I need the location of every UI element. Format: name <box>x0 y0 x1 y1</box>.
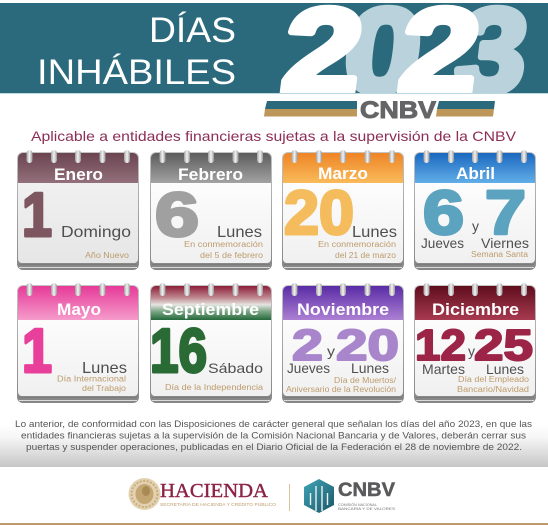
logo: CNBV: COMISIÓN NACIONAL <box>338 502 377 507</box>
calendar: Abril: Viernes <box>481 235 529 251</box>
subtitle: Aplicable a entidades financieras sujetas a la supervisión de la CNBV <box>31 128 517 144</box>
calendar: Mayo: 1 <box>22 317 52 386</box>
calendar: Noviembre: 20 <box>336 321 399 370</box>
calendar: Enero: Año Nuevo <box>85 251 130 260</box>
header banner <box>0 3 548 94</box>
calendar: Noviembre: Aniversario de la Revolución <box>286 385 396 394</box>
calendar: Enero: Domingo <box>61 224 131 241</box>
calendar: Mayo: Lunes <box>82 360 127 377</box>
title: INHÁBILES <box>37 53 236 92</box>
calendar: Septiembre: Día de la Independencia <box>165 383 264 392</box>
calendar: Septiembre: Septiembre <box>162 300 259 319</box>
calendar: Diciembre: 25 <box>474 321 533 370</box>
calendar: Marzo: del 21 de marzo <box>335 251 397 260</box>
calendar: Noviembre: 2 <box>292 321 323 370</box>
calendar: Marzo: En conmemoración <box>318 240 396 249</box>
calendar: Noviembre: Jueves <box>287 360 330 376</box>
calendar: Febrero: Febrero <box>178 165 243 184</box>
calendar: Mayo <box>17 283 139 403</box>
calendar: Enero <box>17 150 139 270</box>
calendar: Mayo: Día Internacional <box>57 374 126 384</box>
calendar: Enero: 1 <box>22 181 52 250</box>
calendar: Febrero: del 5 de febrero <box>200 251 264 260</box>
icon: CNBV hexagon <box>304 479 334 513</box>
icon: national seal <box>128 478 160 510</box>
calendar: Marzo: Marzo <box>318 164 368 183</box>
calendar: Diciembre: Día del Empleado <box>458 375 530 384</box>
logo: Hacienda: SECRETARÍA DE HACIENDA Y CRÉDITO PÚBLICO <box>160 501 277 507</box>
calendar: Noviembre: y <box>327 343 335 359</box>
calendar: Marzo: 20 <box>284 179 354 248</box>
calendar: Noviembre <box>282 283 404 403</box>
legal note: Lo anterior, de conformidad con las Disposiciones de carácter general que señalan los días del año 2023, en que las <box>15 419 532 430</box>
calendar: Septiembre <box>150 283 272 403</box>
calendar: Noviembre: Noviembre <box>297 300 389 319</box>
calendar: Febrero: En conmemoración <box>184 240 263 249</box>
calendar: Febrero: 6 <box>155 181 199 250</box>
legal note <box>0 419 548 467</box>
calendar: Septiembre: 16 <box>150 317 207 386</box>
calendar: Diciembre: y <box>468 343 475 359</box>
logo: Hacienda <box>128 478 277 510</box>
calendar: Diciembre <box>414 283 536 403</box>
CNBV stripes and wordmark <box>264 97 495 124</box>
logo: CNBV <box>304 479 396 513</box>
calendar: Abril: y <box>472 218 479 234</box>
calendar: Mayo: Mayo <box>57 300 101 319</box>
calendar: Abril <box>414 150 536 270</box>
calendar: Diciembre: Bancario/Navidad <box>457 385 529 394</box>
title <box>37 11 236 92</box>
calendar: Diciembre: Martes <box>422 361 465 377</box>
legal note: entidades financieras sujetas a la supervisión de la Comisión Nacional Bancaria y de Valores, deberán cerrar sus <box>21 430 526 442</box>
calendar: Abril: Jueves <box>421 235 464 251</box>
calendar: Diciembre: Diciembre <box>432 300 519 319</box>
logo: Hacienda: HACIENDA <box>160 480 269 502</box>
calendar: Marzo <box>282 150 404 270</box>
calendar: Abril: Abril <box>456 164 495 183</box>
calendar: Noviembre: Lunes <box>351 360 389 376</box>
calendar: Enero: Enero <box>54 165 103 184</box>
calendar: Marzo: Lunes <box>352 224 397 241</box>
logo: CNBV: BANCARIA Y DE VALORES <box>338 507 396 511</box>
calendar: Noviembre: Día de Muertos/ <box>334 376 397 385</box>
calendar: Diciembre: Lunes <box>486 361 524 377</box>
calendar: Febrero: Lunes <box>217 224 262 241</box>
CNBV stripes and wordmark: CNBV <box>360 97 436 124</box>
calendar: Febrero <box>150 150 272 270</box>
logo: CNBV: CNBV <box>338 480 395 501</box>
calendar: Mayo: del Trabajo <box>82 384 127 393</box>
legal note: puertas y suspender operaciones, publicadas en el Diario Oficial de la Federación el 28 de noviembre de 2022. <box>26 442 522 453</box>
calendar: Abril: Semana Santa <box>471 250 529 259</box>
calendar: Abril: 6 <box>423 179 464 248</box>
calendar: Abril: 7 <box>485 179 526 248</box>
calendar: Diciembre: 12 <box>415 321 466 370</box>
calendar: Septiembre: Sábado <box>208 360 263 376</box>
year 2023 <box>280 4 527 93</box>
title: DÍAS <box>149 11 236 50</box>
